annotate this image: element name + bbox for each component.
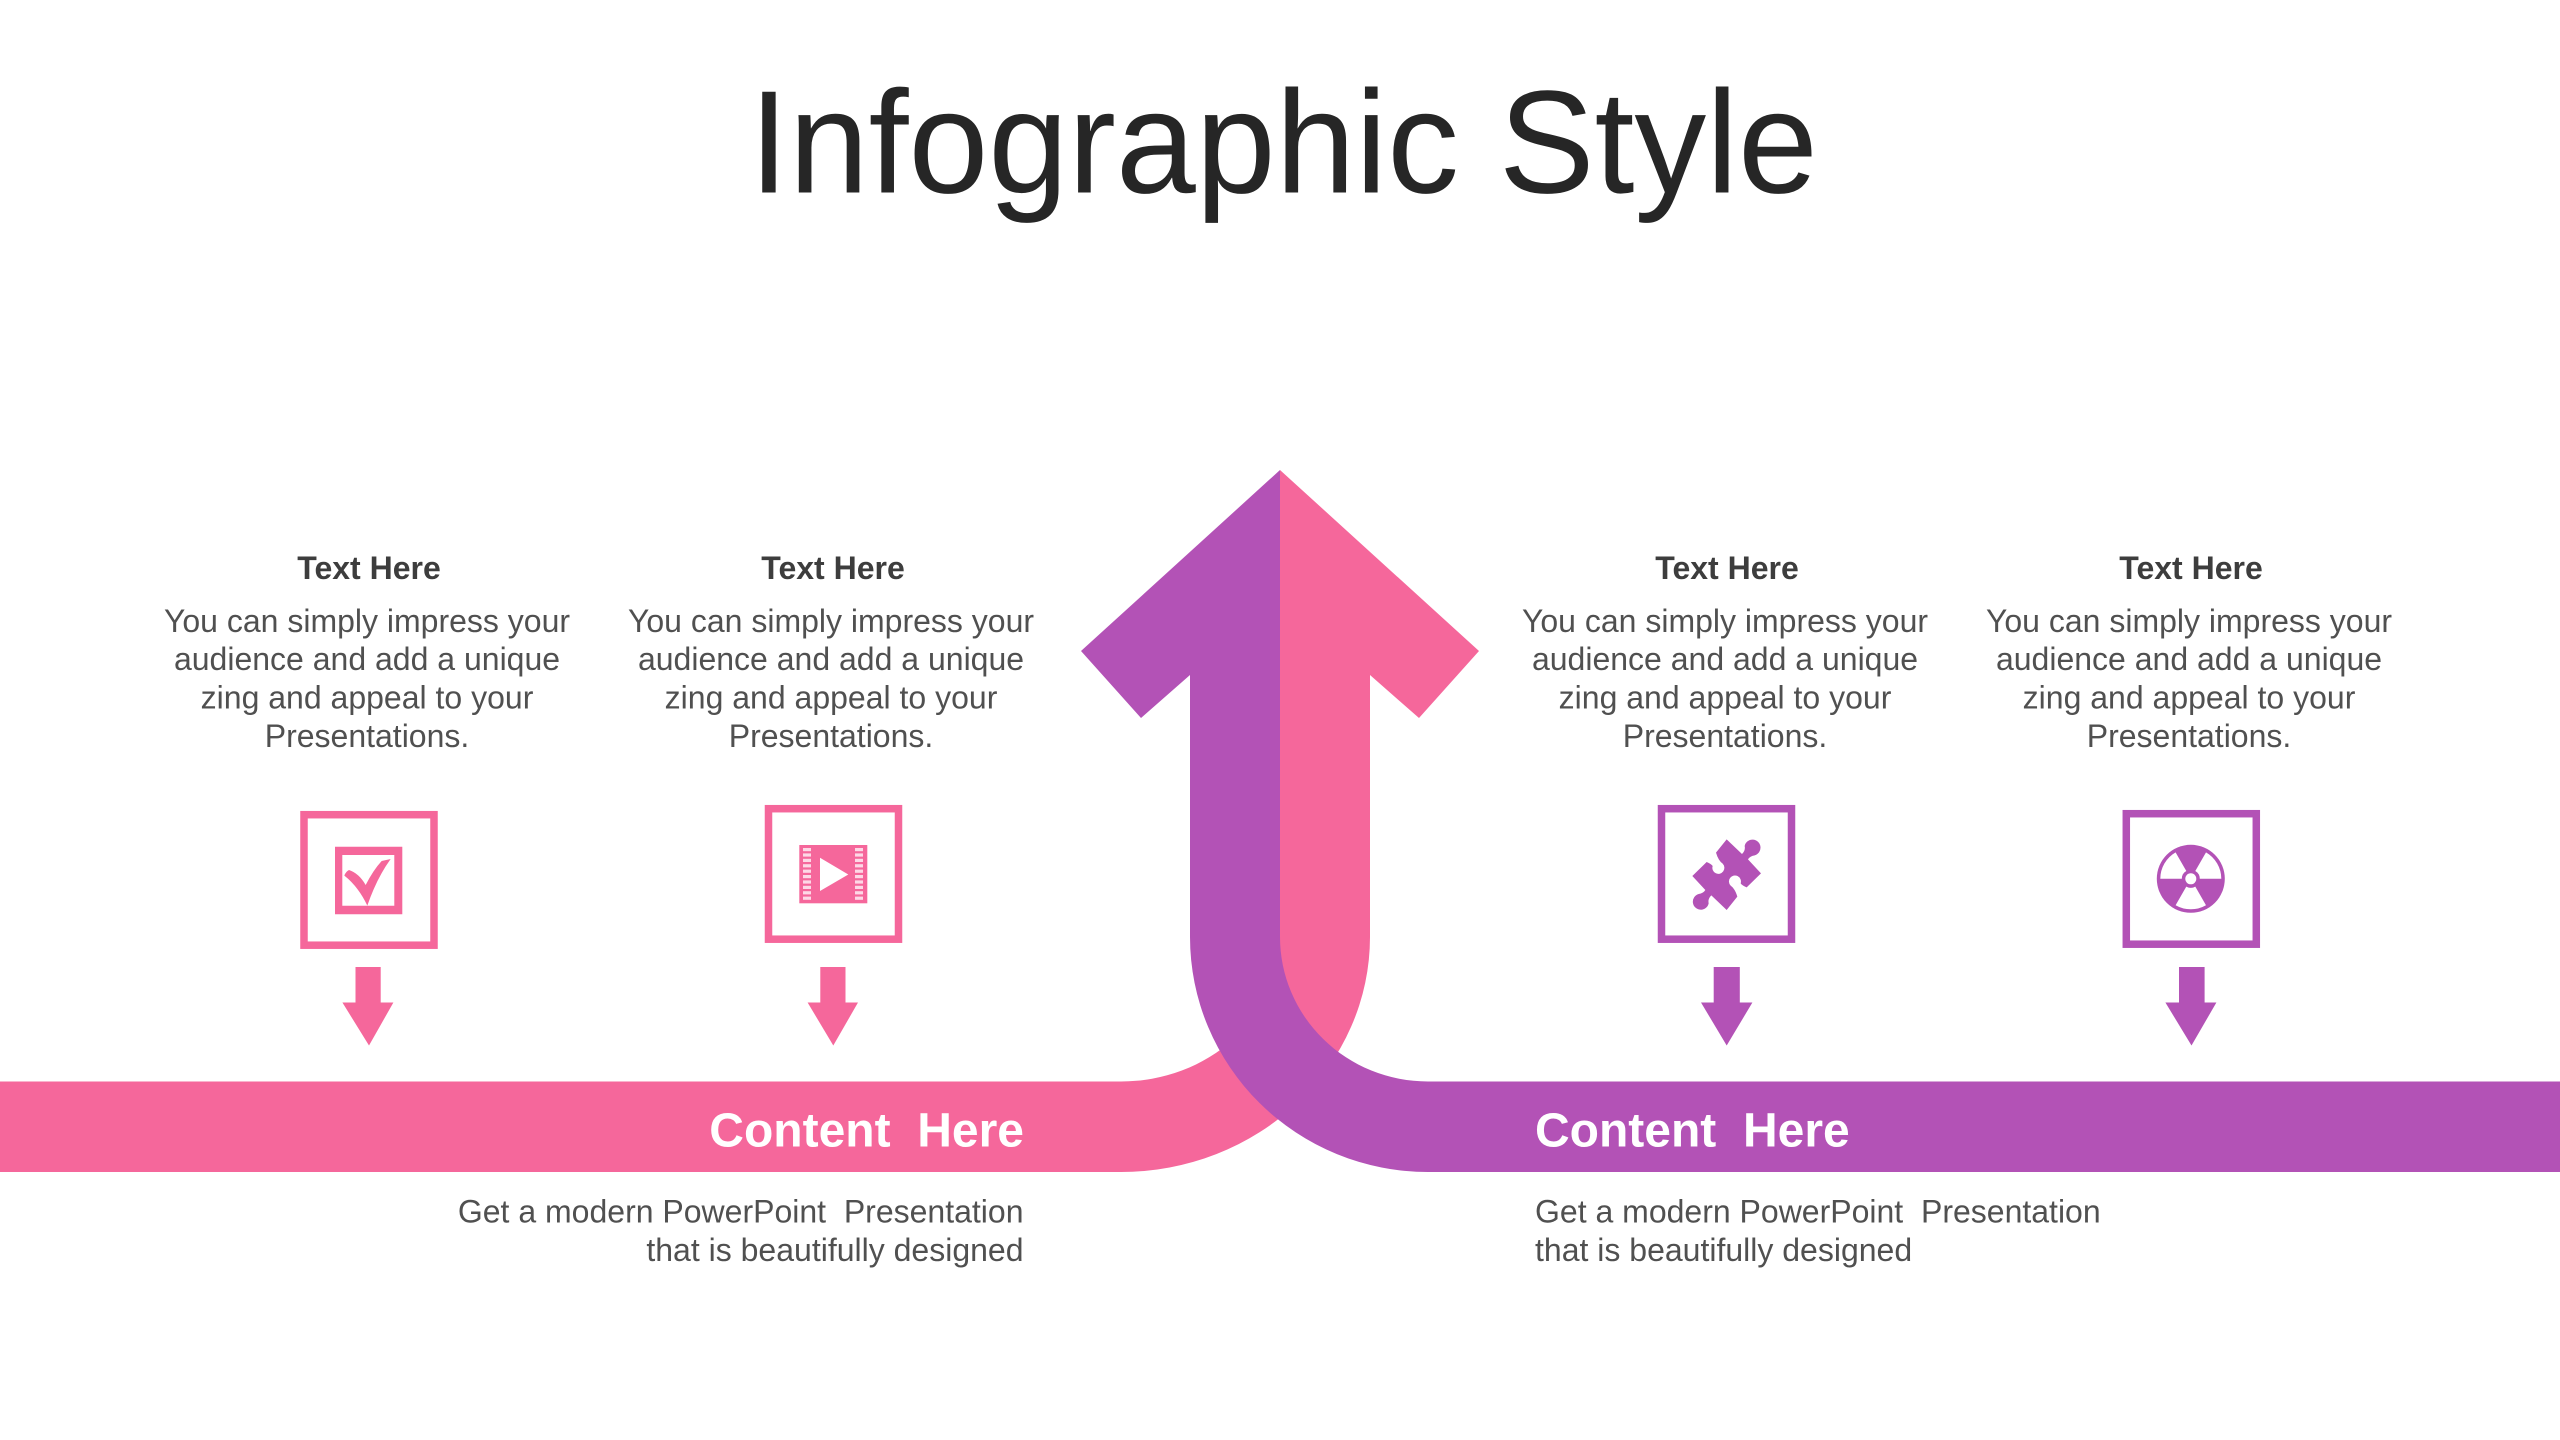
right caption	[1535, 1194, 2101, 1268]
column 1 heading: Text Here	[297, 550, 441, 586]
right caption: Get a modern PowerPoint Presentation	[1535, 1194, 2101, 1230]
column 2 body: You can simply impress your	[628, 603, 1034, 639]
left caption: Get a modern PowerPoint Presentation	[458, 1194, 1024, 1230]
icon: checkbox in pink frame	[304, 815, 434, 945]
icon: film play in pink frame	[768, 809, 898, 939]
column 3 body: audience and add a unique	[1532, 641, 1918, 677]
column 4 body: audience and add a unique	[1996, 641, 2382, 677]
column 1 body	[164, 603, 570, 754]
column 2 body: audience and add a unique	[638, 641, 1024, 677]
column 3 heading: Text Here	[1655, 550, 1799, 586]
column 4 body: You can simply impress your	[1986, 603, 2392, 639]
band label: left content heading: Content Here	[709, 1104, 1024, 1158]
arrow: down, column 2	[808, 967, 858, 1046]
left caption: that is beautifully designed	[646, 1232, 1024, 1268]
column 1 text	[164, 550, 570, 754]
arrow: down, column 4	[2165, 967, 2216, 1046]
icon: puzzle piece in purple frame	[1662, 809, 1792, 939]
column 1 body: audience and add a unique	[174, 641, 560, 677]
column 2 text	[628, 550, 1034, 754]
column 3 body: zing and appeal to your	[1559, 680, 1892, 716]
arrow: pink ribbon rising from the left band	[0, 470, 1479, 1172]
column 1 body: Presentations.	[265, 718, 469, 754]
icon: radiation symbol in purple frame	[2126, 814, 2256, 944]
column 2 body	[628, 603, 1034, 754]
column 4 body: zing and appeal to your	[2023, 680, 2356, 716]
column 4 body: Presentations.	[2087, 718, 2291, 754]
left caption	[458, 1194, 1024, 1268]
arrow: down, column 3	[1701, 967, 1752, 1046]
column 4 heading: Text Here	[2119, 550, 2263, 586]
column 2 body: Presentations.	[729, 718, 933, 754]
column 1 body: zing and appeal to your	[201, 680, 534, 716]
column 4 body	[1986, 603, 2392, 754]
arrow: down, column 1	[342, 967, 393, 1046]
column 4 text	[1986, 550, 2392, 754]
column 2 body: zing and appeal to your	[665, 680, 998, 716]
column 3 text	[1522, 550, 1928, 754]
column 3 body: You can simply impress your	[1522, 603, 1928, 639]
column 2 heading: Text Here	[761, 550, 905, 586]
column 3 body: Presentations.	[1623, 718, 1827, 754]
arrow: purple ribbon rising from the right band	[1081, 470, 2560, 1172]
band label: right content heading: Content Here	[1535, 1104, 1850, 1158]
column 1 body: You can simply impress your	[164, 603, 570, 639]
title: Infographic Style	[749, 60, 1818, 224]
right caption: that is beautifully designed	[1535, 1232, 1912, 1268]
column 3 body	[1522, 603, 1928, 754]
